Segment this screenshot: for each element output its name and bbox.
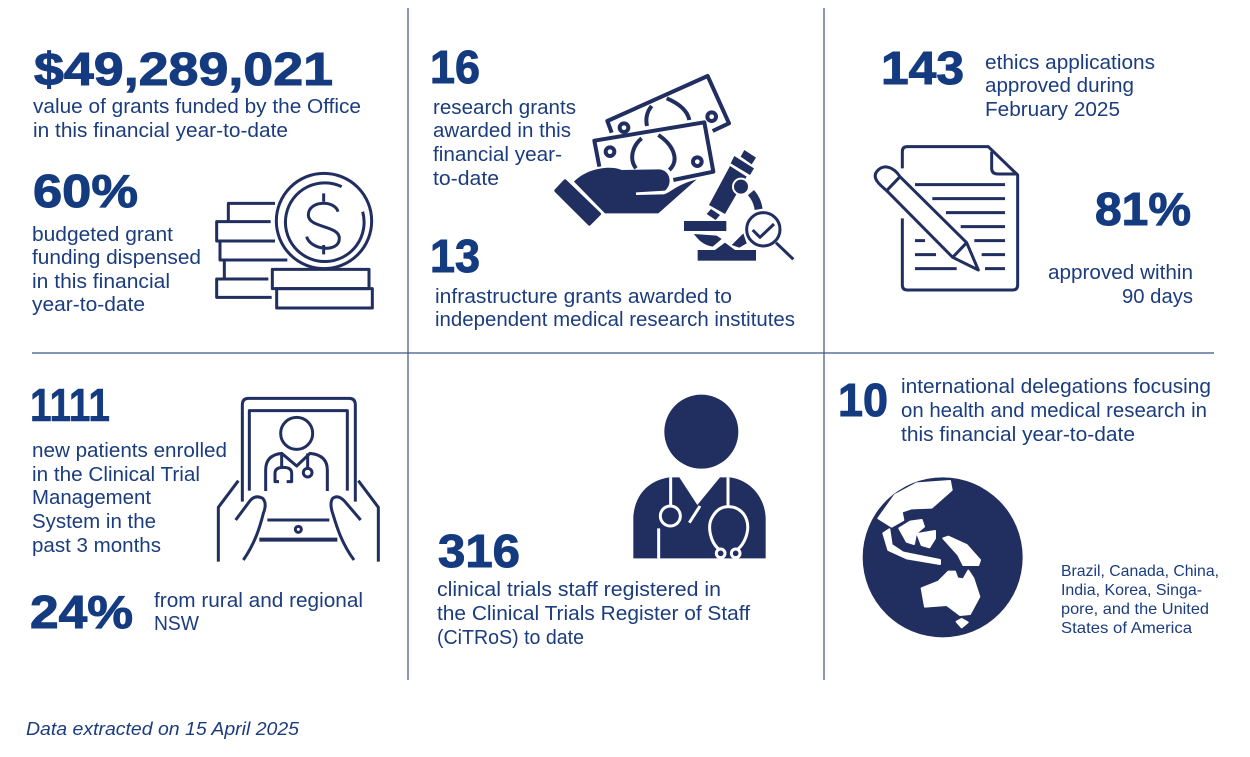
icon: hands holding tablet with doctor [218, 398, 378, 562]
stat: research grants: research grants [433, 97, 576, 119]
stat: patients enrolled: past 3 months [32, 535, 161, 557]
panel: research and infrastructure grants [430, 41, 795, 331]
stat: staff registered: clinical trials staff registered in [437, 579, 721, 601]
stat: budget dispensed: year-to-date [32, 294, 145, 316]
stat: staff registered: (CiTRoS) to date [437, 627, 584, 649]
stat: ethics approvals: February 2025 [985, 99, 1120, 121]
stat: approved within 90 days: 81% [1095, 183, 1191, 235]
footnote: data extraction date: Data extracted on 15 April 2025 [26, 719, 300, 739]
stat: budget dispensed: 60% [33, 165, 138, 217]
icon: hand holding banknotes [556, 76, 729, 224]
stat: budget dispensed: funding dispensed [32, 247, 201, 269]
stat: ethics approvals: 143 [881, 42, 964, 94]
stat: staff registered: 316 [438, 525, 520, 577]
stat: delegations: this financial year-to-date [901, 424, 1135, 446]
stat: patients enrolled: new patients enrolled [32, 440, 227, 462]
stat: delegations: 10 [838, 374, 888, 426]
stat: patients enrolled: Management [32, 487, 151, 509]
stat: grant value [33, 43, 361, 142]
stat: grant value: $49,289,021 [34, 43, 333, 95]
stat: delegations: on health and medical research in [901, 400, 1207, 422]
stat: approved within 90 days: approved within [1048, 262, 1193, 284]
stat: patients enrolled [30, 379, 227, 557]
text: countries list: Brazil, Canada, China, [1061, 563, 1219, 580]
stat: delegations [838, 374, 1211, 446]
stat: research grants: awarded in this [433, 120, 571, 142]
stat: rural and regional share: 24% [30, 586, 133, 638]
stat: ethics approvals: ethics applications [985, 52, 1155, 74]
stat: staff registered [437, 525, 750, 649]
stat: patients enrolled: System in the [32, 511, 156, 533]
stat: infrastructure grants: infrastructure grants awarded to [435, 286, 732, 308]
text: countries list: India, Korea, Singa- [1061, 582, 1202, 599]
panel: clinical trial patients [30, 379, 378, 638]
stat: staff registered: the Clinical Trials Register of Staff [437, 603, 750, 625]
icon: microscope with magnifier [684, 150, 793, 261]
stat: grant value: in this financial year-to-date [33, 120, 288, 142]
icon: document and pencil [875, 147, 1018, 290]
stat: research grants [430, 41, 576, 190]
stat: budget dispensed: in this financial [32, 271, 170, 293]
stat: ethics approvals: approved during [985, 75, 1134, 97]
stat: rural and regional share [30, 586, 363, 638]
stat: infrastructure grants [430, 230, 795, 331]
stat: research grants: financial year- [433, 144, 562, 166]
text: countries list [1061, 563, 1219, 637]
stat: research grants: to-date [433, 168, 499, 190]
panel: grant funding [32, 43, 372, 316]
stat: budget dispensed: budgeted grant [32, 224, 173, 246]
stat: infrastructure grants: 13 [430, 230, 480, 282]
stat: ethics approvals [881, 42, 1155, 121]
stat: delegations: international delegations focusing [901, 376, 1211, 398]
stat: patients enrolled: 1111 [30, 379, 110, 431]
stat: rural and regional share: from rural and regional [154, 590, 363, 612]
stat: approved within 90 days [1048, 183, 1193, 308]
panel: international delegations [838, 374, 1219, 637]
stat: budget dispensed [32, 165, 201, 316]
panel: ethics applications [875, 42, 1193, 308]
stat: research grants: 16 [430, 41, 480, 93]
icon: doctor with stethoscope [633, 395, 766, 558]
text: countries list: pore, and the United [1061, 601, 1209, 618]
panel: clinical trials staff [437, 395, 766, 649]
stat: grant value: value of grants funded by the Office [33, 96, 361, 118]
text: countries list: States of America [1061, 620, 1192, 637]
stat: rural and regional share: NSW [154, 613, 199, 635]
icon: coins [217, 173, 372, 308]
stat: patients enrolled: in the Clinical Trial [32, 464, 200, 486]
icon: globe [863, 477, 1023, 637]
stat: approved within 90 days: 90 days [1122, 286, 1193, 308]
stat: infrastructure grants: independent medical research institutes [435, 309, 795, 331]
